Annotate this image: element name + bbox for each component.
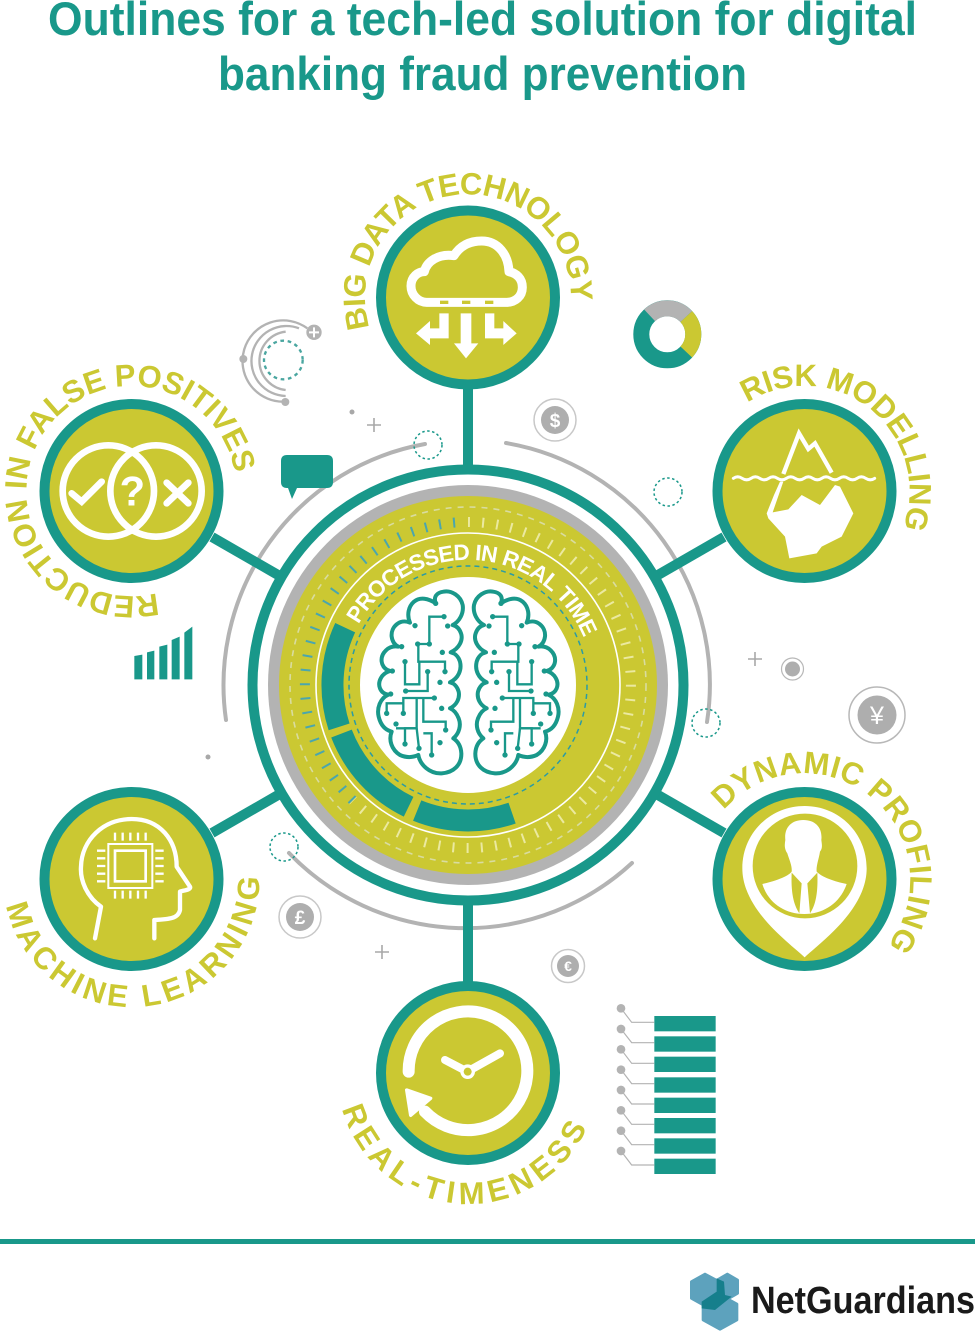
icon: signal bars [134, 627, 192, 679]
icon: speech bubble [281, 455, 333, 499]
icon: dotted circles [270, 431, 720, 861]
icon: venn check question cross: ? [120, 467, 145, 514]
teal arc segments [332, 628, 512, 820]
icon: donut chart [641, 308, 693, 360]
icon: plus marks and dots [206, 410, 762, 959]
icon: pound coin: £ [295, 908, 306, 929]
icon: server stack list [617, 1004, 716, 1174]
icon: yen coin: ¥ [869, 702, 884, 730]
processed in real time label: PROCESSED IN REAL TIME [346, 544, 598, 637]
node: real-timeness: REAL-TIMENESS [342, 1103, 584, 1204]
icon: euro coin [552, 950, 584, 982]
title: banking fraud prevention [218, 47, 747, 100]
logo: NetGuardians [691, 1274, 975, 1329]
node: risk modelling [712, 364, 931, 583]
node: big data technology [344, 172, 593, 390]
footer rule [0, 1239, 975, 1244]
outer gray arcs [224, 443, 710, 928]
icon: head with chip [81, 819, 190, 938]
icon: clock with loop arrow [407, 1011, 527, 1130]
icon: small gray coin [782, 658, 804, 680]
node: dynamic profiling: DYNAMIC PROFILING [710, 752, 932, 952]
node: risk modelling: RISK MODELLING [739, 364, 931, 530]
icon: iceberg [733, 433, 875, 558]
icon: dollar coin: $ [550, 411, 561, 432]
node: reduction in false positives: REDUCTION IN FALSE POSITIVES [5, 364, 254, 618]
icon: circuit brain [378, 591, 559, 773]
icon: orbit [239, 320, 322, 406]
title [48, 0, 917, 100]
icon: yen coin [849, 687, 905, 743]
icon: pound coin [279, 896, 321, 938]
icon: profile location pin [742, 806, 867, 957]
node: machine learning [6, 787, 260, 1008]
icon: cloud with arrows [411, 241, 522, 358]
node: machine learning: MACHINE LEARNING [6, 878, 260, 1008]
node: real-timeness [342, 981, 584, 1204]
icon: euro coin: € [564, 958, 572, 974]
connector lines [212, 380, 724, 990]
icon: venn check question cross [63, 445, 202, 537]
node: big data technology: BIG DATA TECHNOLOGY [344, 172, 593, 330]
icon: dollar coin [534, 399, 576, 441]
central hub [248, 464, 688, 906]
logo mark [691, 1274, 738, 1329]
